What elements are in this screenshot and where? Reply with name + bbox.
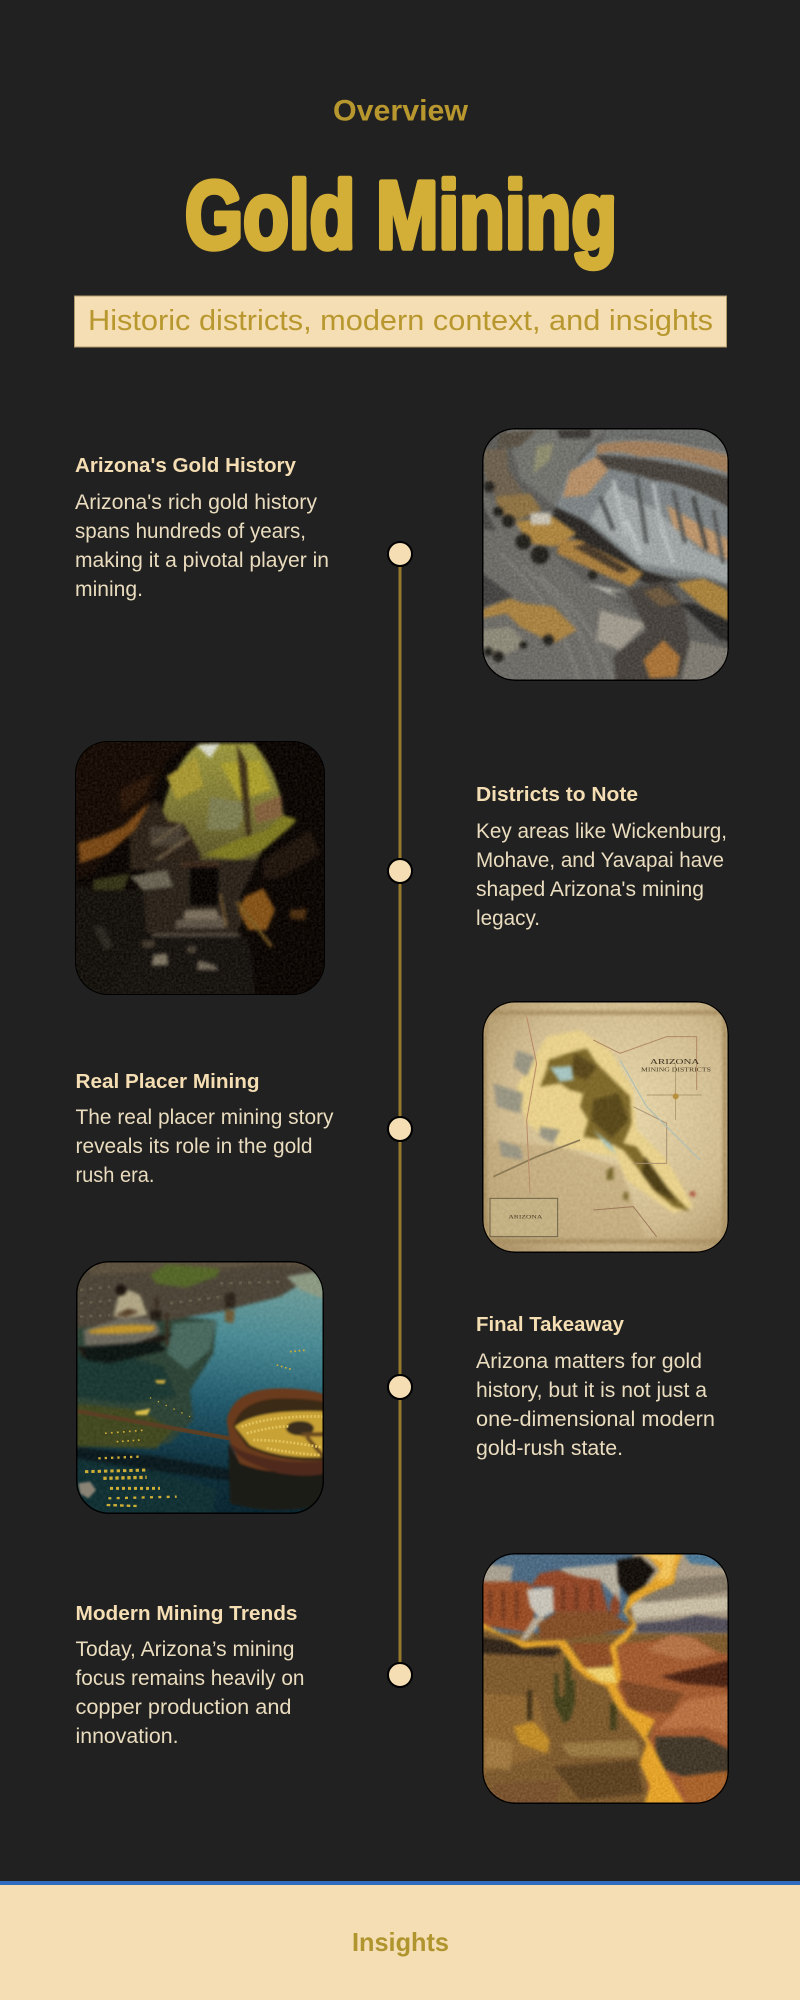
text block: Modern Mining Trends: copper production and <box>76 1696 292 1719</box>
title: Gold Mining: Gold Mining <box>185 162 617 269</box>
text block: Arizona's Gold History <box>75 455 329 601</box>
text block: Final Takeaway <box>476 1314 715 1460</box>
eyebrow: Overview: Overview <box>333 94 469 128</box>
text block: Final Takeaway: Final Takeaway <box>476 1314 625 1336</box>
photo: open pit mine with haul trucks <box>482 428 729 681</box>
timeline node 1 <box>388 542 412 566</box>
text block: Modern Mining Trends <box>76 1603 304 1748</box>
footer band: Insights <box>0 1881 800 2000</box>
text block: Arizona's Gold History: Arizona's Gold History <box>75 455 297 477</box>
text block: Final Takeaway: history, but it is not just a <box>476 1379 707 1402</box>
text block: Modern Mining Trends: innovation. <box>76 1725 178 1748</box>
text block: Real Placer Mining: Real Placer Mining <box>76 1071 260 1093</box>
subtitle banner: Historic districts, modern context, and insights <box>88 305 713 337</box>
text block: Modern Mining Trends: Modern Mining Trends <box>76 1603 298 1625</box>
text block: Arizona's Gold History: Arizona's rich gold history <box>75 491 318 514</box>
text block: Arizona's Gold History: making it a pivotal player in <box>75 549 329 572</box>
text block: Districts to Note <box>476 784 727 930</box>
text block: Arizona's Gold History: mining. <box>75 578 143 601</box>
text block: Real Placer Mining <box>76 1071 334 1187</box>
text block: Final Takeaway: Arizona matters for gold <box>476 1350 702 1373</box>
timeline node 5 <box>388 1663 412 1687</box>
text block: Districts to Note: shaped Arizona's mining <box>476 878 704 901</box>
text block: Districts to Note: Mohave, and Yavapai have <box>476 849 724 872</box>
text block: Modern Mining Trends: focus remains heavily on <box>76 1667 304 1690</box>
text block: Final Takeaway: gold-rush state. <box>476 1437 623 1460</box>
timeline node 4 <box>388 1375 412 1399</box>
text block: Real Placer Mining: rush era. <box>76 1164 154 1187</box>
photo: vintage map of Arizona mining districts <box>480 998 733 1255</box>
text block: Districts to Note: Key areas like Wickenburg, <box>476 820 727 843</box>
text block: Arizona's Gold History: spans hundreds of years, <box>75 520 306 543</box>
text block: Final Takeaway: one-dimensional modern <box>476 1408 715 1431</box>
timeline node 3 <box>388 1117 412 1141</box>
footer band: Insights: Insights <box>352 1927 449 1957</box>
photo: vintage map of Arizona mining districts: MINING DISTRICTS <box>641 1068 711 1074</box>
text block: Districts to Note: legacy. <box>476 907 540 930</box>
photo: vintage map of Arizona mining districts: ARIZONA <box>650 1057 700 1066</box>
text block: Modern Mining Trends: Today, Arizona’s mining <box>76 1638 294 1661</box>
text block: Districts to Note: Districts to Note <box>476 784 638 806</box>
text block: Real Placer Mining: reveals its role in the gold <box>76 1135 312 1158</box>
subtitle banner <box>74 296 726 347</box>
timeline node 2 <box>388 859 412 883</box>
photo: placer mining pans in a river <box>73 1258 330 1517</box>
text block: Real Placer Mining: The real placer mining story <box>76 1106 334 1129</box>
photo: mine entrance seen from a cave <box>75 741 325 995</box>
timeline spine <box>398 554 402 1675</box>
photo: vintage map of Arizona mining districts: ARIZONA <box>508 1216 543 1221</box>
photo: Arizona desert split by a vein of gold <box>477 1547 737 1810</box>
